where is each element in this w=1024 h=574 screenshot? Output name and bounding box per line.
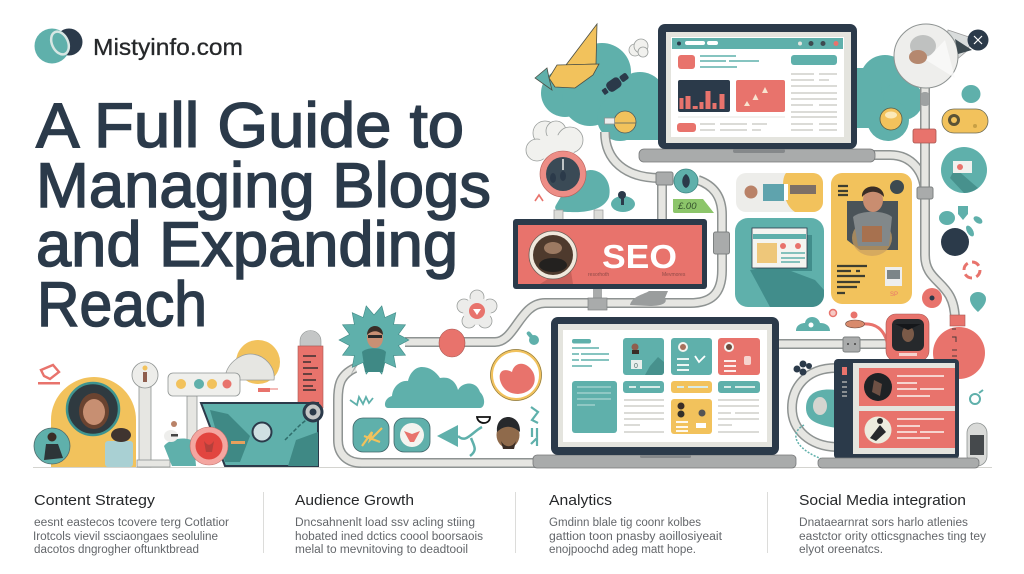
coral pipe joint [439, 329, 465, 357]
coral sphere [933, 315, 985, 379]
pipe: right of main laptop [872, 155, 955, 320]
coral thermometer [298, 331, 323, 408]
text block: Analytics [549, 492, 723, 556]
sidebar text lines [791, 74, 837, 130]
SEO stand [588, 289, 668, 310]
laptop base [639, 149, 875, 162]
teal cloud behind main laptop left [541, 43, 666, 141]
heading: Content Strategy: Content Strategy [34, 492, 156, 509]
teal cloud [385, 367, 484, 408]
body: Audience Growth: melal to mevnitoving to deadtooil [295, 544, 468, 556]
body: Content Strategy [33, 517, 229, 556]
teal tablet [201, 403, 322, 466]
right laptop frame [834, 359, 959, 459]
teal blob under dial [555, 170, 610, 212]
title: Reach [37, 270, 207, 340]
teal blob [962, 85, 980, 103]
coral hose [846, 312, 888, 345]
body: Social Media integration: Dnataearnrat sors harlo atlenies [799, 517, 968, 529]
pipe: globe stem [921, 86, 929, 190]
teal drop [970, 292, 986, 312]
yellow profile card [831, 173, 912, 304]
icon: small cloud [629, 39, 648, 57]
title: Managing Blogs [36, 151, 491, 221]
center laptop base [533, 455, 796, 468]
center laptop frame [551, 317, 779, 455]
globe magnifier [894, 24, 972, 88]
teal text panel [572, 381, 617, 433]
coral hand icon [38, 365, 60, 384]
icon tile: chart sparks [353, 418, 389, 452]
body: Audience Growth: hobated ined dctics coool boorsaois [295, 531, 483, 543]
teal apple badge [674, 169, 698, 193]
icon: paper bird [535, 24, 599, 90]
body: Social Media integration: eastctor ority otticsgnaches ting tey [799, 531, 986, 543]
heading: Audience Growth: Audience Growth [295, 492, 414, 509]
logo [34, 28, 243, 64]
teal glyphs [531, 407, 538, 446]
traffic sign [168, 373, 240, 396]
SEO label: SEO [602, 238, 677, 275]
teal ring icon [970, 390, 983, 404]
body: Content Strategy: dacotos dngrogher oftunktbread [34, 544, 199, 556]
body: Analytics: enojpoochd adeg matt hope. [549, 544, 696, 556]
teal circle badge [941, 147, 987, 193]
small social card [736, 173, 823, 212]
coral clamp [913, 129, 936, 143]
post one [859, 368, 955, 406]
body: Content Strategy: Irotcols vievil ssciaongaes seoluline [33, 531, 218, 543]
logo mark [34, 28, 82, 64]
sun and dome [225, 340, 280, 392]
pipe: ring loop [792, 368, 836, 447]
sign post [187, 396, 197, 440]
black half ring [477, 417, 490, 423]
body: Analytics: Gmdinn blale tig coonr kolbes [549, 517, 701, 529]
pipe: SEO to star [405, 180, 722, 342]
figure with teal robe [164, 421, 196, 466]
green price tag: £.00 [677, 201, 697, 212]
SEO caption left: resorhoth [588, 272, 609, 278]
teal arrow [437, 425, 482, 456]
heading: Social Media integration: Social Media integration [799, 492, 966, 509]
grey tag [967, 423, 987, 466]
body: Analytics: gattion toon pnasby aoillosiyeait [549, 531, 723, 543]
gold ring map [490, 350, 542, 400]
title: and Expanding [36, 210, 458, 280]
ground line [33, 466, 992, 468]
right laptop base [818, 458, 979, 468]
teal inner swirl [806, 390, 836, 428]
text block: Social Media integration [799, 492, 986, 556]
profile photo [847, 186, 898, 256]
body: Content Strategy: eesnt eastecos tcovere terg Cotlatior [34, 517, 229, 529]
pipe connector center [843, 337, 860, 352]
yellow arch with portraits [34, 377, 136, 467]
yellow profile card: SP [890, 292, 898, 298]
small teal icon [611, 191, 635, 212]
lamp post [132, 362, 170, 467]
text block [572, 339, 609, 366]
coral caret [535, 195, 543, 201]
teal button [791, 55, 837, 65]
body: Social Media integration [799, 517, 986, 556]
teal browser tile [735, 218, 824, 307]
SEO photo [529, 231, 577, 284]
pipe: connector down to SEO board [657, 185, 667, 220]
title: A Full Guide to [36, 91, 464, 161]
coral chart panel [736, 80, 785, 112]
yellow team card [671, 399, 712, 434]
laptop screen frame [658, 24, 857, 149]
coral badge [190, 427, 228, 465]
small teal cloud [796, 317, 830, 331]
yellow toggle pill [942, 109, 988, 133]
body: Audience Growth [295, 517, 483, 556]
teal leaf blobs [939, 206, 984, 238]
pipe: valve to connector [605, 132, 660, 178]
teal user card: 0 [634, 363, 638, 370]
teal zigzag [350, 397, 373, 405]
icon: gold coin [880, 108, 902, 130]
green price tag [673, 199, 714, 213]
body: Analytics [549, 517, 723, 556]
title [36, 91, 491, 340]
lower content row [677, 117, 785, 132]
pipe: bottom loop [338, 368, 545, 463]
teal user card [623, 338, 664, 375]
teal profile card [671, 338, 712, 375]
jar with dog [105, 428, 133, 467]
profile block [678, 55, 759, 69]
body: Social Media integration: elyot oreenatcs. [799, 544, 883, 556]
post two [859, 411, 955, 448]
pipe: between lower laptops [775, 339, 890, 349]
logo text: Mistyinfo.com [93, 34, 243, 60]
coral flower [922, 288, 942, 308]
pipe connector [656, 172, 673, 185]
main laptop [639, 24, 875, 162]
right laptop [818, 359, 979, 468]
divider [766, 492, 768, 553]
bar chart [678, 80, 730, 112]
coral portrait card [886, 314, 929, 361]
text block: Audience Growth [295, 492, 483, 556]
coral profile card [718, 338, 760, 375]
teal dots [526, 331, 539, 345]
icon: yellow valve [604, 111, 636, 133]
pipe connector right [917, 187, 933, 199]
icon tile: heart [394, 418, 430, 452]
teal cloud behind main laptop right [850, 55, 923, 141]
beaded cable [796, 425, 825, 460]
heading: Analytics: Analytics [549, 492, 612, 509]
coral dashed ring [964, 262, 980, 278]
small portrait [34, 428, 70, 464]
flower icon [457, 290, 497, 328]
pill row [623, 381, 760, 393]
cloud above dial [526, 121, 583, 161]
dial gauge [540, 151, 586, 197]
dark ball [941, 228, 969, 256]
icon: dark capsule [600, 71, 631, 97]
body: Audience Growth: Dncsahnenlt load ssv acling stiing [295, 517, 475, 529]
coral ring dot [830, 310, 836, 316]
center laptop [533, 317, 796, 468]
divider [262, 492, 264, 553]
dial legs [554, 210, 603, 220]
large portrait [67, 383, 119, 435]
portrait: helmet head [496, 417, 520, 449]
SEO caption right: Mevmores [662, 272, 686, 278]
dark puzzle blob [794, 360, 812, 376]
starburst badge [339, 306, 409, 376]
SEO billboard [513, 219, 707, 289]
grey text columns [624, 400, 759, 432]
browser header [672, 38, 843, 49]
pipe connector on right elbow [714, 232, 730, 254]
text block: Content Strategy [33, 492, 229, 556]
close button [968, 30, 988, 50]
right laptop sidebar [842, 367, 847, 396]
divider [514, 492, 516, 553]
